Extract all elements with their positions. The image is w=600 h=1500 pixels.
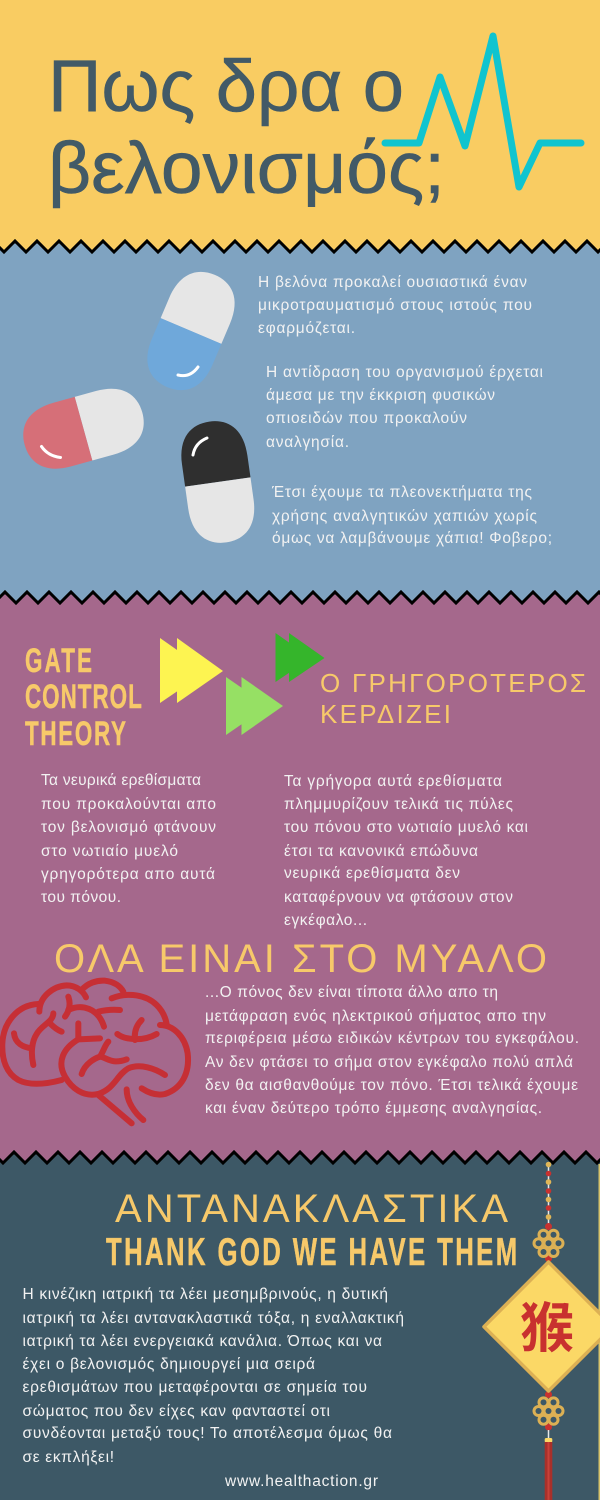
panel: pills and analgesia [0, 241, 600, 610]
icon: dark green arrows [276, 633, 324, 682]
text block: natural opioids: Η αντίδραση του οργανισμού έρχεται [266, 364, 543, 381]
title: Πως δρα ο [48, 46, 404, 127]
text block: natural opioids: άμεσα με την έκκριση φυσικών [266, 387, 495, 404]
text block: benefits without pills: όμως να λαμβάνουμε χάπια! Φοβερο; [272, 530, 552, 547]
heading: the fastest wins: Ο ΓΡΗΓΟΡΟΤΕΡΟΣ [320, 668, 586, 698]
text block: needle microtrauma: μικροτραυματισμό στους ιστούς που [258, 297, 532, 314]
text block: meridians: ερεθισμάτων που μεταφέρονται σε σημεία του [22, 1379, 367, 1396]
heading: reflexes: ΑΝΤΑΝΑΚΛΑΣΤΙΚΑ [115, 1187, 508, 1231]
heading: gate control theory: CONTROL [25, 678, 142, 716]
icon: red capsule [16, 381, 151, 477]
panel: reflexes [0, 1152, 600, 1500]
text block: meridians: συνδέονται μεταξύ τους! Το αποτέλεσμα όμως θα [22, 1425, 392, 1442]
text block: pain in the brain: ...Ο πόνος δεν είναι τίποτα άλλο απο τη [205, 984, 498, 1001]
text block: benefits without pills: Έτσι έχουμε τα πλεονεκτήματα της [271, 484, 532, 501]
text block: pain in the brain: και έναν δεύτερο τρόπο έμμεσης αναλγησίας. [205, 1100, 542, 1117]
heading: gate control theory: THEORY [25, 715, 126, 753]
text block: natural opioids: αναλγησία. [266, 434, 349, 451]
text block: pain in the brain: περιφέρεια μέσω ειδικών κέντρων του εγκεφάλου. [205, 1030, 579, 1047]
text block: needle microtrauma [258, 274, 532, 337]
text block: acupuncture signals: γρηγορότερα απο αυτά [41, 866, 215, 883]
text block: meridians: ιατρική τα λέει ενεργειακά κανάλια. Όπως και να [22, 1333, 382, 1350]
text block: benefits without pills [271, 484, 552, 547]
icon: yellow arrows [160, 638, 223, 703]
text block: flooding the gates: εγκέφαλο... [284, 912, 367, 929]
right edge line [598, 1164, 600, 1500]
text block: flooding the gates: νευρικά ερεθίσματα δεν [284, 865, 460, 882]
text block: natural opioids [266, 364, 543, 451]
website url: www.healthaction.gr [224, 1473, 378, 1490]
text block: acupuncture signals: που προκαλούνται απο [41, 796, 216, 813]
text block: pain in the brain: μετάφραση ενός ηλεκτρικού σήματος απο την [205, 1008, 546, 1025]
text block: acupuncture signals: Τα νευρικά ερεθίσματα [41, 772, 201, 789]
panel: gate control theory [0, 592, 600, 1170]
icon: chinese hanging ornament [484, 1162, 600, 1500]
text block: meridians: ιατρική τα λέει αντανακλαστικά τόξα, η εναλλακτική [22, 1310, 404, 1327]
text block: flooding the gates: έτσι τα κανονικά επώδυνα [284, 843, 478, 860]
icon: upper knot [532, 1229, 564, 1258]
text block: pain in the brain: Αν δεν φτάσει το σήμα στον εγκέφαλο πολύ απλά [205, 1054, 573, 1071]
text block: acupuncture signals: του πόνου. [41, 889, 121, 906]
panel: title header [0, 0, 600, 260]
text block: flooding the gates: πλημμυρίζουν τελικά τις πύλες [284, 796, 513, 813]
icon: black capsule [177, 417, 259, 547]
text block: natural opioids: οπιοειδών που προκαλούν [266, 410, 467, 427]
icon: blue capsule [137, 262, 245, 400]
icon: lower knot [532, 1396, 564, 1426]
icon: heartbeat line [385, 36, 581, 187]
title: βελονισμός; [48, 128, 445, 209]
text block: pain in the brain [205, 984, 579, 1117]
heading: gate control theory [25, 642, 142, 753]
text block: acupuncture signals: τον βελονισμό φτάνουν [41, 819, 216, 836]
heading: thank god we have them: THANK GOD WE HAVE THEM [106, 1231, 517, 1274]
icon: light green arrows [226, 677, 283, 735]
text block: flooding the gates [284, 773, 528, 929]
text block: meridians: έχει ο βελονισμός δημιουργεί μια σειρά [22, 1356, 315, 1373]
heading: it is all in the mind: ΟΛΑ ΕΙΝΑΙ ΣΤΟ ΜΥΑΛΟ [54, 937, 547, 981]
text block: flooding the gates: Τα γρήγορα αυτά ερεθίσματα [284, 773, 502, 790]
text block: acupuncture signals [41, 772, 216, 906]
heading: the fastest wins [320, 668, 586, 729]
text block: needle microtrauma: εφαρμόζεται. [258, 320, 355, 337]
text block: flooding the gates: του πόνου στο νωτιαίο μυελό και [284, 819, 528, 836]
title [48, 46, 445, 209]
heading: gate control theory: GATE [25, 642, 92, 680]
icon: diamond plaque [484, 1262, 600, 1391]
icon: brain [2, 981, 188, 1123]
text block: acupuncture signals: στο νωτιαίο μυελό [41, 843, 178, 860]
text block: meridians [22, 1286, 404, 1466]
text block: meridians: σε εκπλήξει! [22, 1449, 114, 1466]
text block: needle microtrauma: Η βελόνα προκαλεί ουσιαστικά έναν [258, 274, 527, 291]
text block: pain in the brain: δεν θα αισθανθούμε τον πόνο. Έτσι τελικά έχουμε [205, 1077, 578, 1094]
icon: tassel [545, 1438, 552, 1500]
text block: meridians: Η κινέζικη ιατρική τα λέει μεσημβρινούς, η δυτική [22, 1286, 388, 1303]
icon: diamond plaque: 猴 [520, 1284, 574, 1363]
text block: flooding the gates: καταφέρνουν να φτάσουν στον [284, 889, 513, 906]
text block: benefits without pills: χρήσης αναλγητικών χαπιών χωρίς [272, 508, 537, 525]
heading: the fastest wins: ΚΕΡΔΙΖΕΙ [320, 699, 451, 729]
text block: meridians: σώματος που δεν είχες καν φανταστεί οτι [22, 1403, 330, 1420]
